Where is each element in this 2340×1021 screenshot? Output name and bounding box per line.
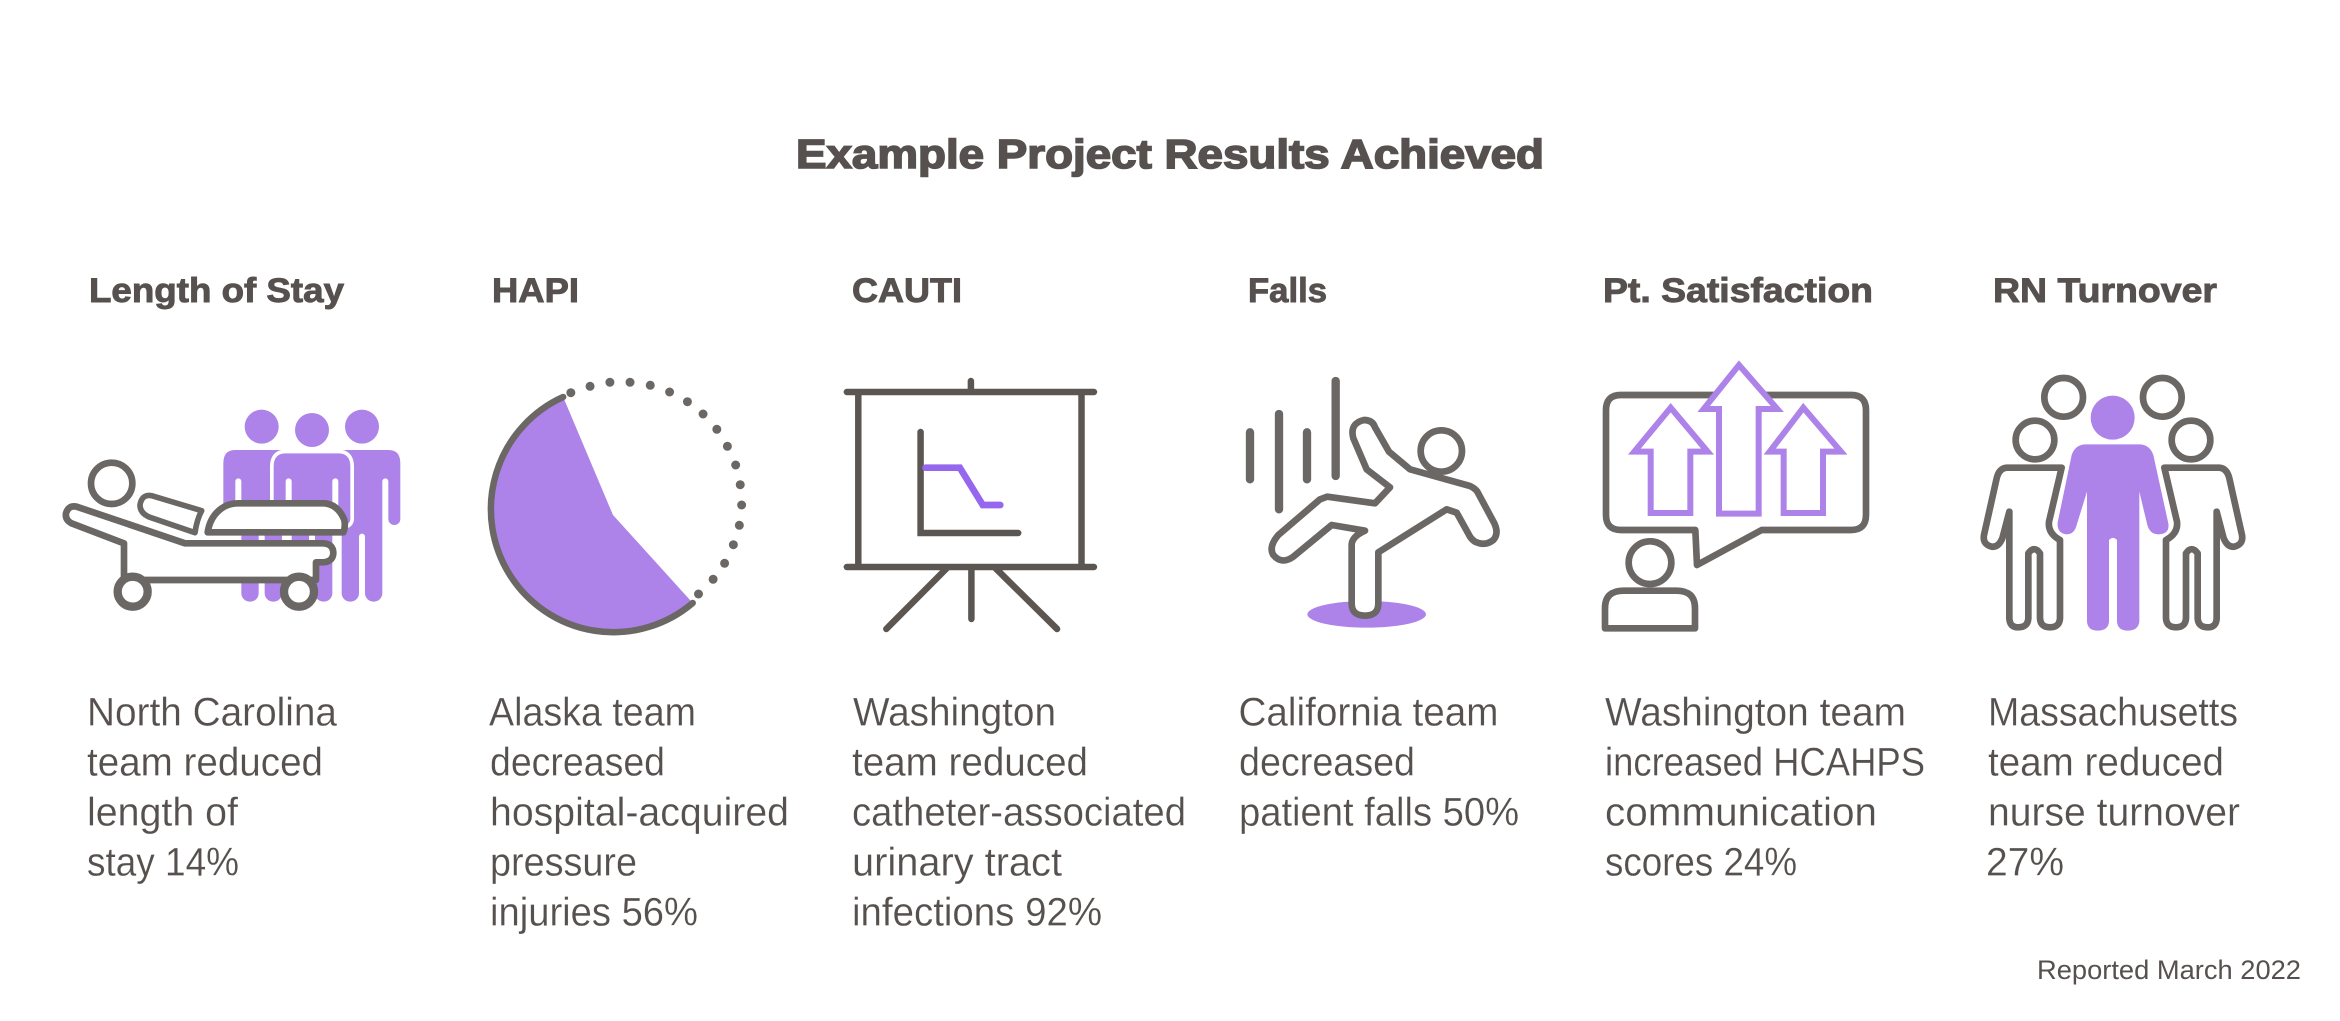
text: length of stay result: North Carolina	[87, 690, 338, 734]
text: falls result: decreased	[1239, 740, 1415, 784]
text: falls result: patient falls 50%	[1239, 790, 1519, 834]
text: length of stay result	[87, 690, 338, 884]
icon: presentation board with falling line chart	[847, 381, 1094, 629]
heading: CAUTI: CAUTI	[852, 272, 962, 310]
text: patient satisfaction result	[1605, 690, 1925, 884]
heading: length of stay: Length of Stay	[89, 272, 344, 310]
text: RN turnover result: nurse turnover	[1988, 790, 2240, 834]
title: Example Project Results Achieved	[796, 131, 1544, 177]
text: CAUTI result: team reduced	[852, 740, 1088, 784]
text: length of stay result: length of	[87, 790, 239, 834]
text: HAPI result	[489, 690, 789, 934]
icon: pie chart with dotted remainder	[491, 378, 746, 632]
footnote: report date: Reported March 2022	[2037, 955, 2301, 985]
icon: patient on bed with care team	[66, 410, 400, 607]
text: CAUTI result	[852, 690, 1186, 934]
text: RN turnover result	[1986, 690, 2240, 884]
panel: falls	[1238, 272, 1519, 834]
text: HAPI result: decreased	[490, 740, 665, 784]
text: length of stay result: team reduced	[87, 740, 323, 784]
text: HAPI result: Alaska team	[489, 690, 696, 734]
heading: HAPI: HAPI	[492, 272, 579, 310]
text: CAUTI result: infections 92%	[852, 890, 1102, 934]
text: RN turnover result: Massachusetts	[1988, 690, 2238, 734]
panel: CAUTI	[847, 272, 1186, 934]
text: RN turnover result: team reduced	[1988, 740, 2224, 784]
heading: falls: Falls	[1248, 272, 1327, 310]
heading: patient satisfaction: Pt. Satisfaction	[1603, 272, 1873, 310]
icon: speech bubble with rising arrows	[1605, 365, 1866, 628]
text: CAUTI result: urinary tract	[852, 840, 1062, 884]
text: CAUTI result: Washington	[853, 690, 1056, 734]
text: patient satisfaction result: scores 24%	[1605, 840, 1797, 884]
text: HAPI result: hospital-acquired	[490, 790, 789, 834]
text: length of stay result: stay 14%	[87, 840, 239, 884]
text: CAUTI result: catheter-associated	[852, 790, 1186, 834]
panel: RN turnover	[1984, 272, 2242, 884]
text: RN turnover result: 27%	[1986, 840, 2064, 884]
text: HAPI result: injuries 56%	[490, 890, 698, 934]
panel: length of stay	[66, 272, 400, 884]
icon: person slipping and falling	[1250, 381, 1497, 628]
icon: nurse surrounded by team	[1984, 378, 2242, 631]
panel: patient satisfaction	[1603, 272, 1925, 884]
text: HAPI result: pressure	[490, 840, 637, 884]
text: falls result: California team	[1238, 690, 1498, 734]
panel: HAPI	[489, 272, 789, 934]
text: patient satisfaction result: increased HCAHPS	[1605, 740, 1925, 784]
heading: RN turnover: RN Turnover	[1993, 272, 2217, 310]
text: patient satisfaction result: communication	[1605, 790, 1877, 834]
text: patient satisfaction result: Washington team	[1605, 690, 1906, 734]
text: falls result	[1238, 690, 1519, 834]
